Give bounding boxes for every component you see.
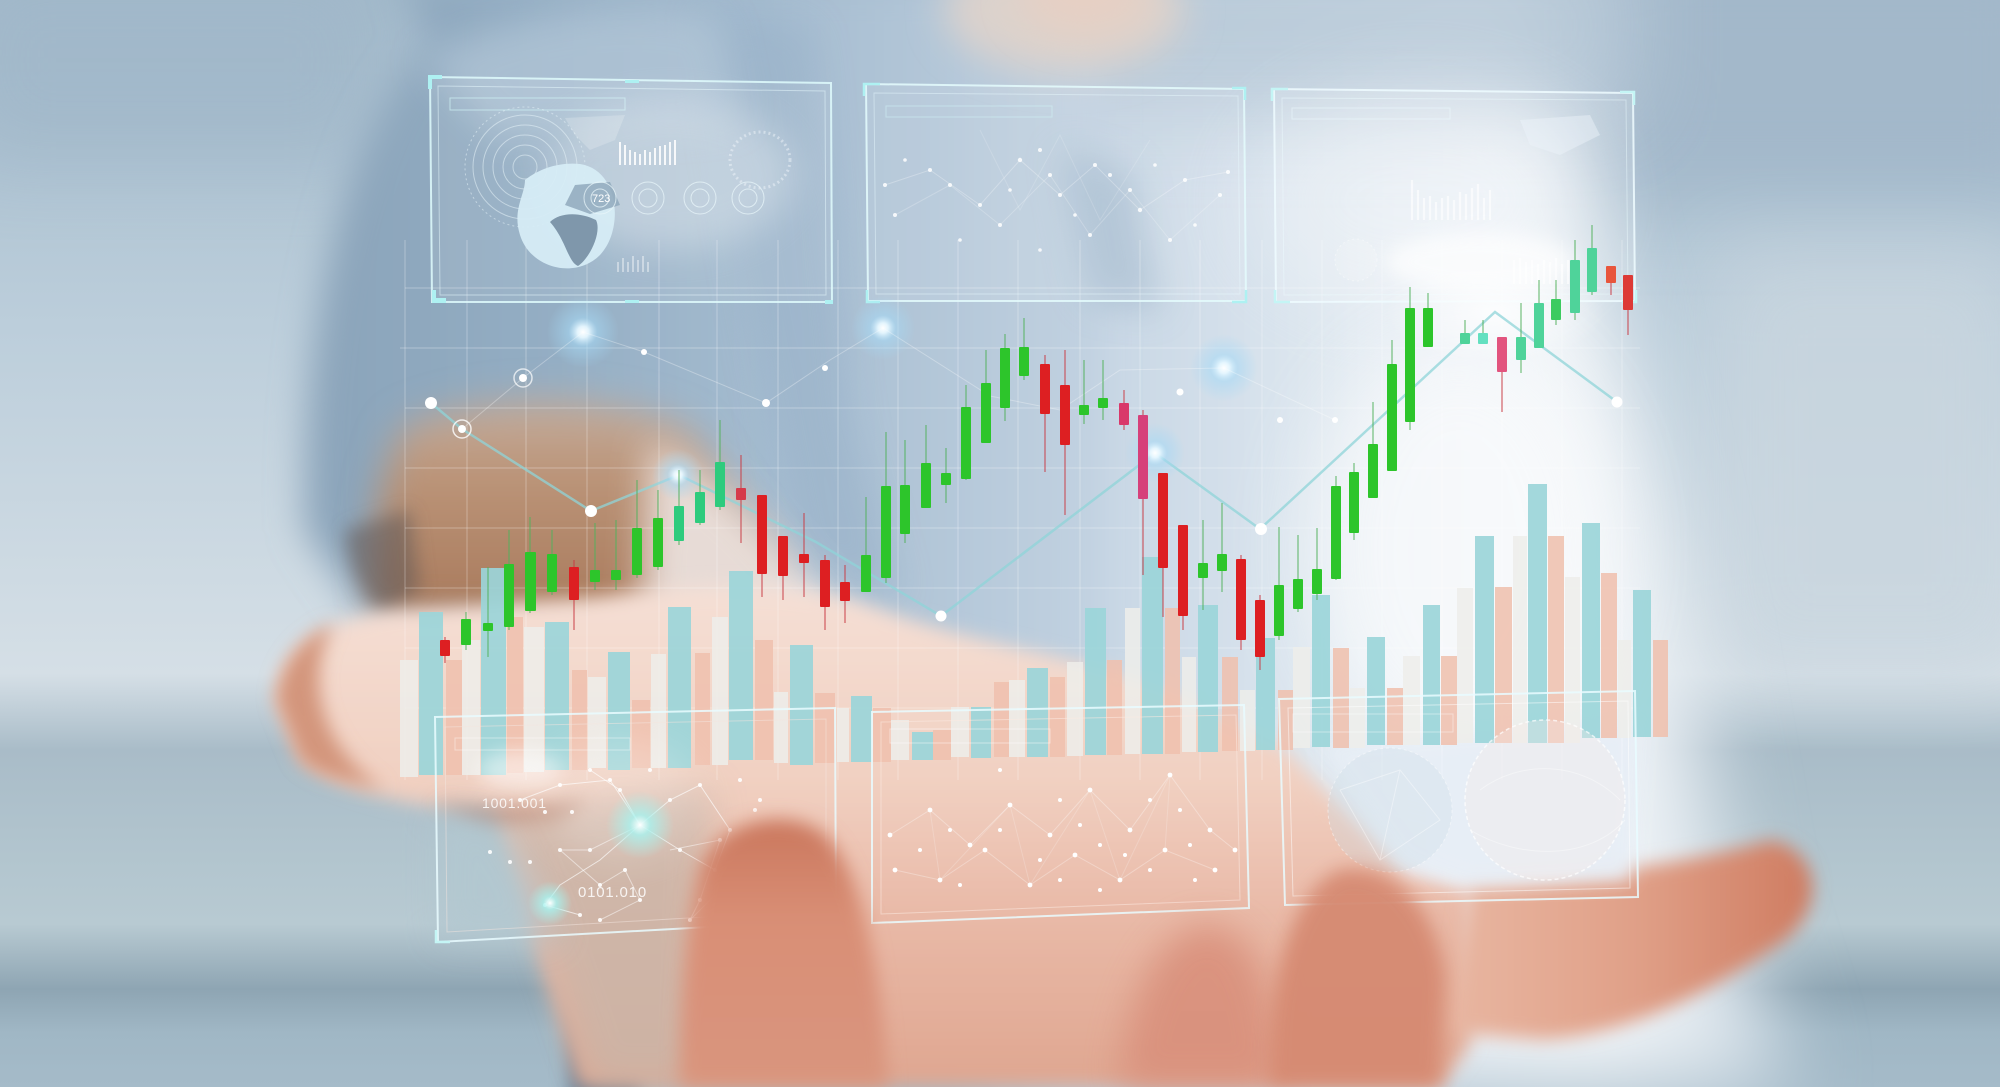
middle finger xyxy=(1120,925,1280,1087)
green candle wicks xyxy=(466,225,1592,657)
red candle bodies xyxy=(440,266,1633,657)
neck xyxy=(945,0,1185,72)
person's shirt, right light side xyxy=(980,0,1790,1087)
pane: wireframe globes bottom right xyxy=(1279,691,1638,905)
ring finger xyxy=(1269,869,1445,1087)
text: binary value upper: 1001.001 xyxy=(482,795,547,811)
pane: analytics top right xyxy=(1272,89,1636,302)
pane: network map top centre xyxy=(864,84,1246,302)
pink bars xyxy=(446,536,1668,775)
front fingers xyxy=(680,820,1445,1087)
chart grid xyxy=(400,240,1640,780)
pane: constellation bottom centre xyxy=(872,705,1249,923)
upper dashboard panes xyxy=(428,75,1636,304)
red candle wicks xyxy=(445,266,1628,670)
forearm behind the hand xyxy=(345,400,860,690)
right hazy glow behind pane xyxy=(1320,720,1640,885)
faded candle bodies at the bright right edge xyxy=(1460,248,1597,360)
glows around the top of the chart xyxy=(547,262,1605,402)
text: dial value: 723 xyxy=(592,193,610,205)
pane: neural network bottom left xyxy=(435,708,836,942)
green candle bodies xyxy=(461,308,1433,645)
teal bars xyxy=(419,484,1651,775)
lower dashboard panes xyxy=(435,691,1638,942)
candlestick chart xyxy=(440,225,1633,670)
person's shirt, left blue side xyxy=(305,0,1100,900)
white bars xyxy=(400,536,1631,777)
teal-green candle bodies xyxy=(674,462,725,541)
shirt shadow at the top right xyxy=(1000,0,1640,120)
open hand palm xyxy=(276,586,1470,1087)
bar chart xyxy=(400,484,1668,777)
text: binary value lower: 0101.010 xyxy=(578,884,647,901)
thumb xyxy=(1447,840,1812,1040)
line chart xyxy=(425,312,1622,622)
index finger xyxy=(680,820,888,1087)
lower-left hazy pane area xyxy=(440,810,560,940)
shirt folds xyxy=(420,8,1610,760)
pane: world globe dashboard xyxy=(428,75,833,304)
icon: globe xyxy=(517,164,620,268)
